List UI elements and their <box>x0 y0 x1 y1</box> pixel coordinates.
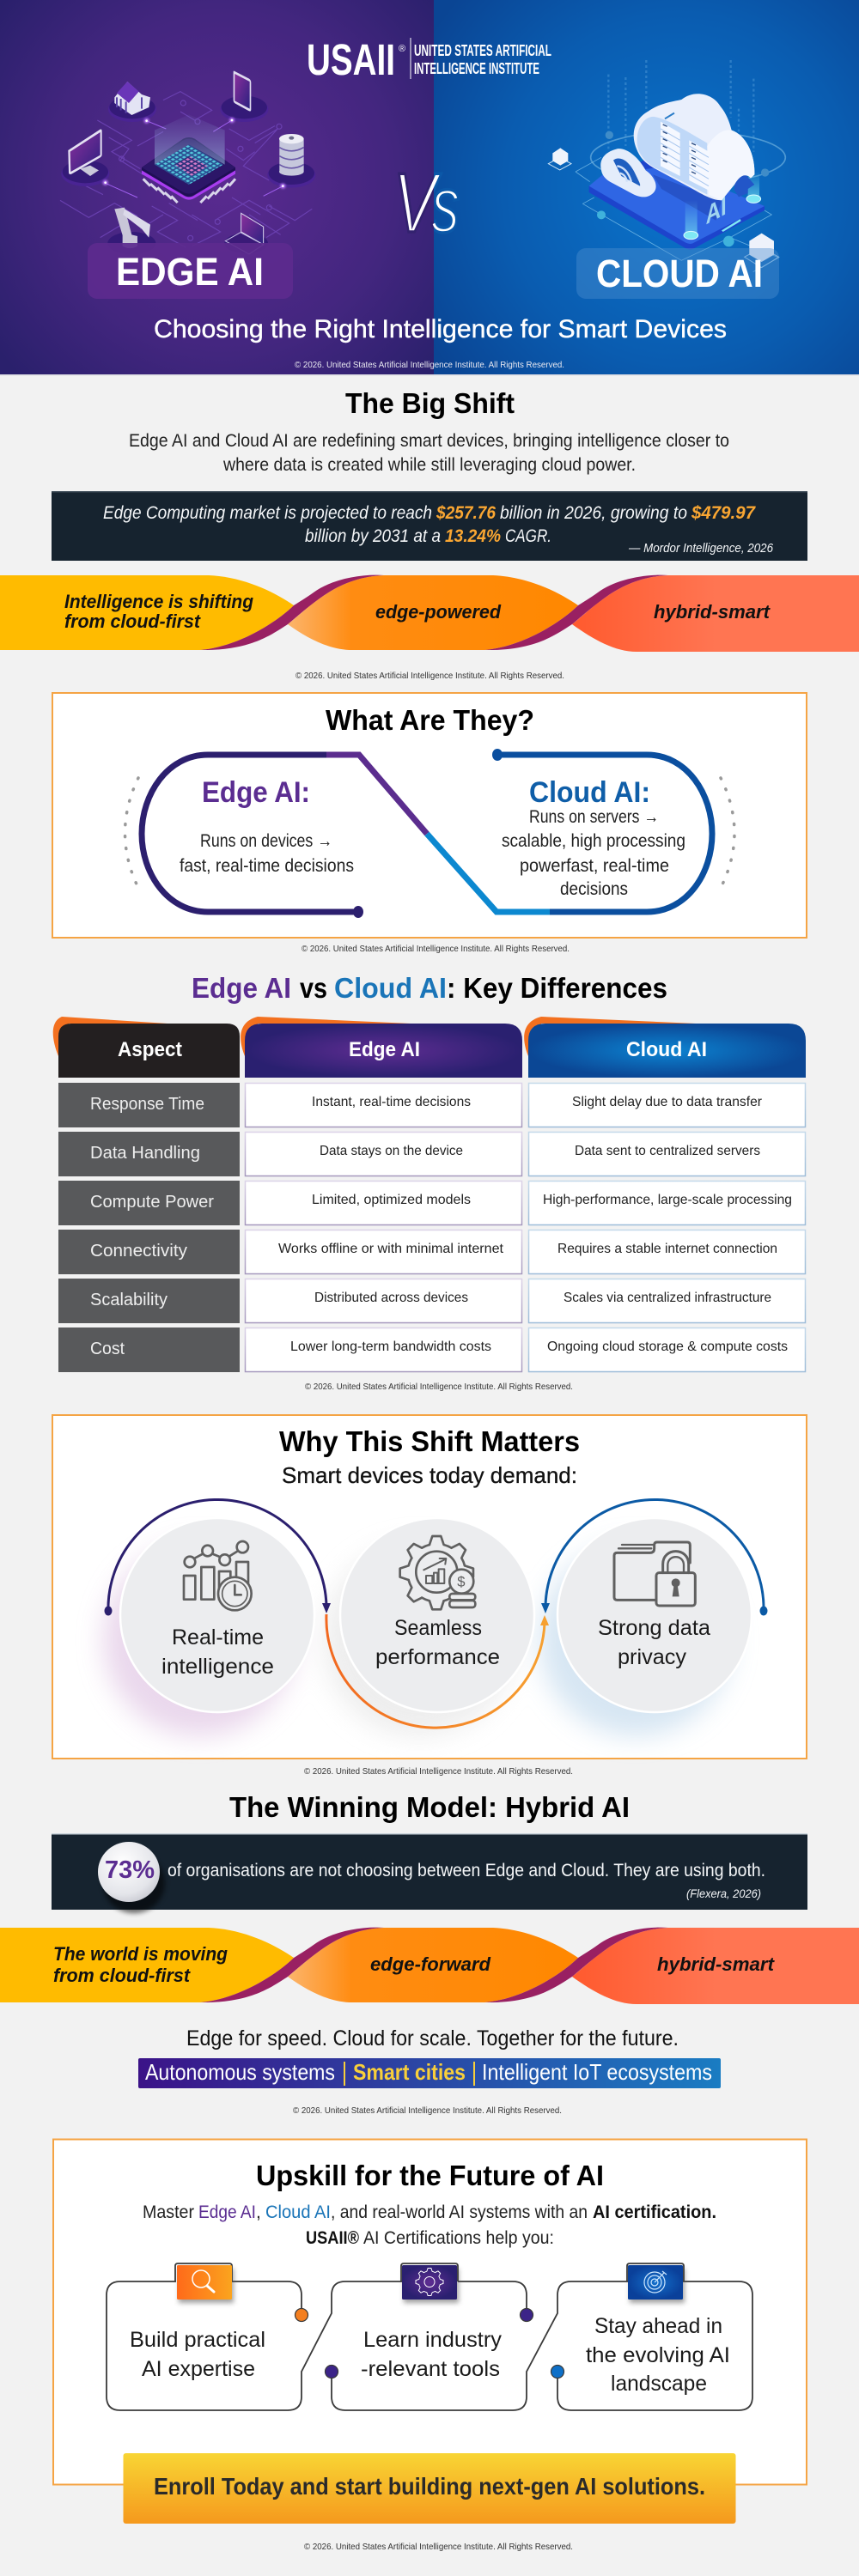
robot arm icon <box>114 208 150 248</box>
ribbon: intelligence shift: from cloud-first <box>64 611 202 632</box>
icon: folder with padlock <box>614 1542 695 1606</box>
ribbon: intelligence shift <box>0 575 859 652</box>
card: learn tools <box>361 2263 502 2381</box>
ribbon: intelligence shift: edge-powered <box>375 601 502 623</box>
logo: USAII <box>307 35 551 84</box>
subheading: Smart devices today demand: <box>282 1462 577 1488</box>
ribbon: intelligence shift: Intelligence is shifting <box>64 591 254 612</box>
panel: what are they <box>52 693 807 938</box>
arrow: blue arc <box>541 1499 768 1616</box>
icon: gear with dollar: $ <box>457 1574 466 1590</box>
row: Compute Power <box>58 1181 806 1225</box>
up arrow <box>734 172 754 197</box>
text: Cloud AI definition: decisions <box>560 879 628 899</box>
arrow: purple arc <box>105 1499 331 1616</box>
text: Edge AI definition: Edge AI: <box>202 776 310 809</box>
panel: winning model <box>0 1791 859 2088</box>
heading: Cloud AI <box>334 972 447 1004</box>
panel: hero banner <box>0 0 859 374</box>
row: Connectivity <box>58 1230 806 1274</box>
stat callout: 13.24% <box>445 526 501 546</box>
tagline: Edge for speed. Cloud for scale. Together for the future. <box>186 2026 679 2050</box>
laptop icon <box>225 213 264 254</box>
copyright: © 2026. United States Artificial Intelligence Institute. All Rights Reserved. <box>295 671 564 681</box>
heading: The Winning Model: Hybrid AI <box>229 1791 630 1823</box>
label: Seamless <box>394 1616 482 1640</box>
ribbon: world is moving: The world is moving <box>53 1943 228 1965</box>
card: learn tools: Learn industry <box>363 2328 502 2352</box>
row: Cost <box>58 1327 806 1372</box>
call to action button <box>124 2453 735 2524</box>
stat callout: — Mordor Intelligence, 2026 <box>628 542 774 556</box>
chip <box>142 114 235 203</box>
use-case bar: Smart cities <box>353 2059 466 2085</box>
stat callout: CAGR. <box>505 526 551 546</box>
orbit ring <box>591 131 785 184</box>
row: Cost: Lower long-term bandwidth costs <box>290 1340 491 1354</box>
copyright: © 2026. United States Artificial Intelligence Institute. All Rights Reserved. <box>304 2542 573 2552</box>
AI letters: AI <box>706 191 727 231</box>
small cubes <box>548 148 779 268</box>
row: Scalability: Distributed across devices <box>314 1291 468 1305</box>
row: Connectivity: Connectivity <box>90 1242 187 1261</box>
row: Response Time: Response Time <box>90 1095 204 1114</box>
stat callout <box>52 491 807 561</box>
label <box>375 1616 500 1669</box>
row: Response Time <box>58 1083 806 1127</box>
row: Response Time: Instant, real-time decisions <box>312 1095 471 1109</box>
card: learn tools: -relevant tools <box>361 2357 500 2381</box>
card: stay ahead: landscape <box>611 2372 707 2396</box>
text: Cloud AI definition: Cloud AI: <box>529 776 650 809</box>
copyright: © 2026. United States Artificial Intelligence Institute. All Rights Reserved. <box>293 2105 562 2116</box>
label: Edge AI: EDGE AI <box>116 250 264 294</box>
table header: Aspect <box>53 1017 240 1078</box>
intro text: , and real-world AI systems with an <box>331 2202 588 2222</box>
intro text: AI Certifications help you: <box>363 2228 554 2248</box>
row: Scalability <box>58 1279 806 1323</box>
logo: USAII: INTELLIGENCE INSTITUTE <box>414 60 539 77</box>
logo: USAII: USAII <box>307 35 395 84</box>
ribbon: world is moving <box>0 1928 859 2004</box>
card: build practical expertise <box>130 2263 265 2381</box>
illustration: edge AI chip and devices <box>60 71 315 255</box>
row: Cost: Cost <box>90 1340 125 1358</box>
stat callout: of organisations are not choosing between Edge and Cloud. They are using both. <box>168 1861 765 1880</box>
row: Data Handling: Data stays on the device <box>320 1144 463 1158</box>
card: stay ahead: the evolving AI <box>586 2343 730 2367</box>
use-case bar: Autonomous systems <box>145 2059 335 2085</box>
platform slab <box>589 159 765 250</box>
connector dots <box>295 2308 564 2379</box>
badge: 73%: 73% <box>105 1856 155 1884</box>
intro text: USAII® <box>306 2228 359 2248</box>
text: Cloud AI definition: scalable, high processing <box>502 831 685 851</box>
label: privacy <box>618 1645 687 1669</box>
row: Scalability: Scalability <box>90 1291 168 1309</box>
intro text <box>143 2202 716 2248</box>
stat callout: (Flexera, 2026) <box>686 1887 761 1900</box>
versus mark: V <box>393 155 442 250</box>
card: stay ahead: Stay ahead in <box>594 2314 722 2338</box>
icon: chart with clock <box>184 1541 252 1610</box>
label <box>161 1625 274 1679</box>
label: Strong data <box>598 1616 710 1640</box>
infinity loop diagram <box>125 749 734 918</box>
row: Response Time: Slight delay due to data transfer <box>572 1095 763 1109</box>
label: Cloud AI: CLOUD AI <box>596 252 763 295</box>
logo: USAII: ® <box>399 44 405 54</box>
device discs <box>61 96 315 255</box>
intro text: AI certification. <box>593 2202 716 2222</box>
use-case bar: Intelligent IoT ecosystems <box>482 2059 712 2085</box>
ribbon: world is moving: hybrid-smart <box>657 1953 776 1975</box>
large cloud <box>634 94 754 200</box>
copyright: © 2026. United States Artificial Intelligence Institute. All Rights Reserved. <box>295 360 564 370</box>
intro text: Master <box>143 2202 194 2222</box>
text: Cloud AI definition <box>502 776 685 899</box>
stat callout: billion by 2031 at a <box>305 526 441 546</box>
phone icon <box>234 71 251 112</box>
row: Connectivity: Requires a stable internet connection <box>557 1242 777 1256</box>
small cloud <box>600 149 656 197</box>
circle: seamless performance <box>340 1518 534 1712</box>
stat callout: billion in 2026, growing to <box>500 503 687 523</box>
heading: : Key Differences <box>447 972 667 1004</box>
soft circle shadows <box>103 1544 732 1736</box>
stat callout: Edge Computing market is projected to reach <box>103 503 432 523</box>
intro text: Edge AI <box>198 2202 256 2222</box>
card: build practical expertise: Build practical <box>130 2328 265 2352</box>
text: Edge AI definition: Runs on devices → <box>200 831 332 851</box>
circle: real-time intelligence <box>120 1518 314 1712</box>
stat callout: $257.76 <box>436 503 496 523</box>
icon: gear with dollar <box>400 1536 475 1609</box>
table header: Edge AI <box>241 1017 522 1078</box>
ribbon: world is moving: from cloud-first <box>53 1965 192 1986</box>
intro text: Edge AI and Cloud AI are redefining smart devices, bringing intelligence closer to <box>129 431 729 451</box>
logo: USAII: UNITED STATES ARTIFICIAL <box>414 42 551 59</box>
row: Scalability: Scales via centralized infrastructure <box>564 1291 771 1305</box>
label: Edge AI <box>88 243 293 299</box>
row: Compute Power: Compute Power <box>90 1193 214 1212</box>
heading: Why This Shift Matters <box>279 1425 580 1457</box>
icon: target <box>627 2263 685 2303</box>
database icon <box>279 134 304 176</box>
panel: the big shift <box>0 387 859 681</box>
label: Real-time <box>172 1625 264 1649</box>
intro text: Cloud AI <box>265 2202 331 2222</box>
table header: Cloud AI: Cloud AI <box>626 1038 707 1061</box>
copyright: © 2026. United States Artificial Intelligence Institute. All Rights Reserved. <box>304 1766 573 1777</box>
icon: gear <box>401 2263 459 2303</box>
row: Cost: Ongoing cloud storage & compute costs <box>547 1340 788 1354</box>
ribbon: intelligence shift: hybrid-smart <box>654 601 771 623</box>
label: intelligence <box>161 1655 274 1679</box>
circle: strong data privacy <box>557 1518 752 1712</box>
table header: Aspect: Aspect <box>118 1038 182 1061</box>
use-case bar <box>138 2058 721 2088</box>
versus mark: s <box>431 161 460 249</box>
arrow: orange arc <box>326 1614 549 1728</box>
heading: What Are They? <box>326 704 534 736</box>
row: Connectivity: Works offline or with minimal internet <box>278 1242 504 1256</box>
monitor icon <box>68 130 102 176</box>
row: Compute Power: High-performance, large-scale processing <box>543 1193 792 1207</box>
row: Compute Power: Limited, optimized models <box>312 1193 471 1207</box>
card: stay ahead <box>586 2263 730 2396</box>
glow connectors <box>103 118 285 197</box>
intro text: , <box>256 2202 261 2222</box>
data streams <box>608 60 753 152</box>
panel: upskill <box>53 2140 807 2524</box>
card: build practical expertise: AI expertise <box>142 2357 255 2381</box>
circuit lines <box>576 157 779 272</box>
ribbon: world is moving: edge-forward <box>370 1953 491 1975</box>
intro text: where data is created while still leveraging cloud power. <box>222 455 636 475</box>
text: Cloud AI definition: Runs on servers → <box>529 807 659 827</box>
copyright: © 2026. United States Artificial Intelligence Institute. All Rights Reserved. <box>305 1382 573 1392</box>
heading <box>192 972 667 1004</box>
light beams <box>684 172 761 240</box>
stat callout <box>52 1833 807 1913</box>
heading: Upskill for the Future of AI <box>256 2160 604 2191</box>
house icon <box>114 82 150 115</box>
text: Edge AI definition <box>180 776 354 876</box>
text: Cloud AI definition: powerfast, real-time <box>520 856 669 876</box>
icon: magnifier <box>175 2263 234 2303</box>
row: Data Handling <box>58 1132 806 1176</box>
badge: 73% <box>98 1842 165 1913</box>
row: Data Handling: Data Handling <box>90 1144 200 1163</box>
intro text <box>129 431 729 475</box>
table header: Edge AI: Edge AI <box>349 1038 420 1061</box>
illustration: cloud AI servers <box>548 60 785 272</box>
heading: The Big Shift <box>345 387 515 419</box>
table header: Cloud AI <box>524 1017 806 1078</box>
card outlines <box>107 2281 752 2410</box>
copyright: © 2026. United States Artificial Intelligence Institute. All Rights Reserved. <box>302 944 570 954</box>
heading: Edge AI <box>192 972 291 1004</box>
call to action button: Enroll Today and start building next-gen AI solutions. <box>154 2473 705 2500</box>
text: Edge AI definition: fast, real-time decisions <box>180 856 354 876</box>
label: performance <box>375 1645 500 1669</box>
stat callout: $479.97 <box>691 503 756 523</box>
row: Data Handling: Data sent to centralized servers <box>575 1144 760 1158</box>
panel: why this shift matters <box>52 1415 807 1759</box>
label <box>598 1616 710 1669</box>
heading: vs <box>300 972 327 1004</box>
panel: key differences table <box>53 972 806 1372</box>
tagline: Choosing the Right Intelligence for Smart Devices <box>154 315 727 343</box>
